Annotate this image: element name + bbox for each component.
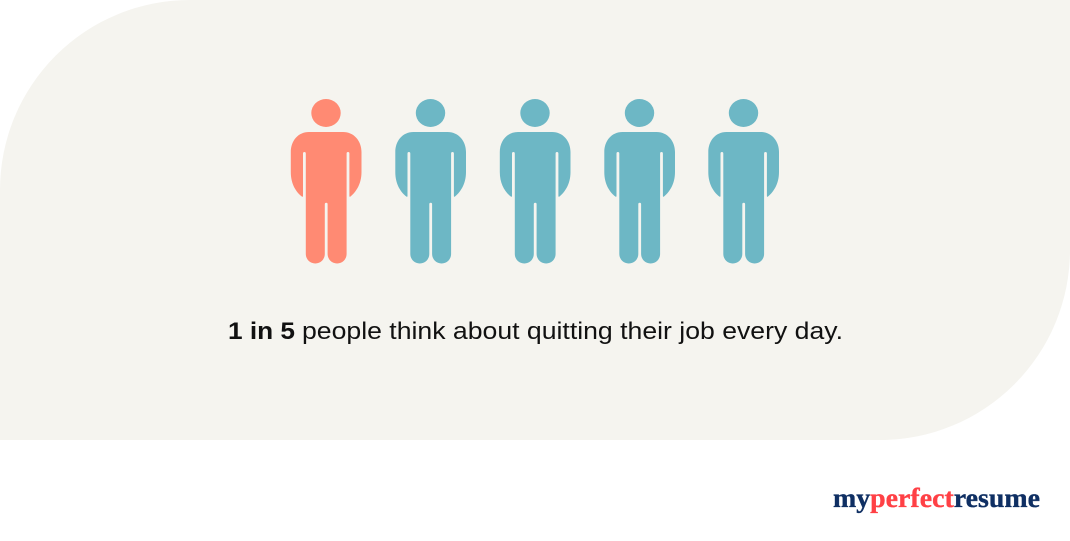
logo: myperfectresume: myperfectresume xyxy=(833,483,1040,513)
caption text: 1 in 5 xyxy=(228,318,295,345)
icon: teal person 5 xyxy=(708,99,779,264)
caption text: people think about quitting their job every day. xyxy=(302,318,843,345)
icon: teal person 3 xyxy=(500,99,570,264)
icon: teal person 4 xyxy=(604,99,675,264)
icon: teal person 2 xyxy=(395,99,466,264)
pictogram row: five people xyxy=(291,99,779,264)
icon: coral person xyxy=(291,99,362,264)
